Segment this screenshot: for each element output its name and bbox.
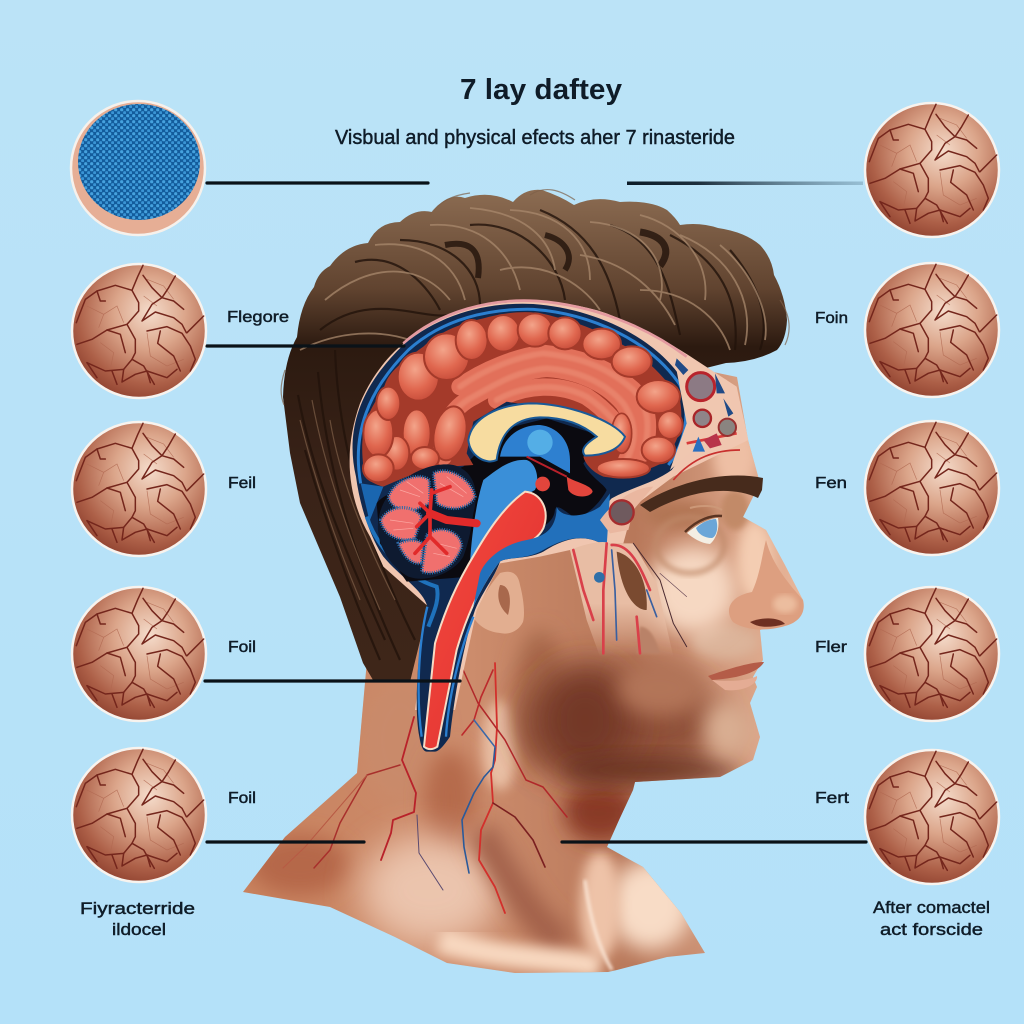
blue strand along lower cerebellum [367,517,438,627]
sphere: right 4 [865,587,999,721]
sphere: right 5 [865,750,999,884]
leader line: top right, fading [627,182,863,185]
sphere: left 4 [72,587,206,721]
caption: left [80,899,195,939]
ear [473,572,524,634]
caption: right: After comactel [873,898,990,917]
hair [281,190,789,682]
sphere: left 2 [72,264,206,398]
orbital vessel [600,487,653,533]
facial bones and vessels [570,542,687,657]
sphere: right 1 [865,103,999,237]
blue lower vessels [473,493,610,607]
label: Foil 1: Foil [228,639,256,656]
label: Fen: Fen [815,475,847,492]
leader lines [205,183,866,842]
mouth [708,662,764,690]
label: Feil: Feil [228,475,256,492]
title: 7 lay daftey [460,74,622,106]
label: Foil 2: Foil [228,790,256,807]
cutaway of the head: brain anatomy [350,301,748,752]
thalamus blue [500,425,570,473]
blue brainstem [470,460,537,563]
label: Fert: Fert [815,790,850,807]
blue inner ring [358,309,686,483]
nose [729,540,804,629]
sphere: blue textured [71,101,205,235]
frontal sinus panel [670,353,740,480]
caption: right: act forscide [880,920,983,939]
blue sphere [527,430,553,455]
sphere: right 2 [865,263,999,397]
pink stripe along top of skull [403,301,687,357]
skin: neck, shoulders, face [243,340,803,973]
label: Flegore: Flegore [227,309,289,326]
navy meninges band [353,304,692,752]
corpus callosum [468,403,625,461]
black inner cavity [377,418,607,582]
caption: right [873,898,990,939]
subtitle: Visbual and physical efects aher 7 rinasteride [335,127,735,149]
sphere: right 3 [865,421,999,555]
red brainstem [424,492,546,749]
eyebrow [640,476,763,512]
pituitary red drops [527,457,593,496]
eye [685,506,722,544]
sphere: left 5 [72,748,206,882]
label: Foin: Foin [815,310,848,327]
skull outer membrane [350,302,748,710]
blue under cerebrum [361,483,383,543]
skin spheres [71,101,999,884]
neck veins [283,663,567,913]
tail vessel stripes [419,607,473,737]
caption: left: Fiyracterride [80,899,195,918]
caption: left: ildocel [112,920,166,939]
sphere: left 3 [72,422,206,556]
cerebrum [362,312,683,487]
label: Fler: Fler [815,639,848,656]
cerebellum [378,464,477,579]
